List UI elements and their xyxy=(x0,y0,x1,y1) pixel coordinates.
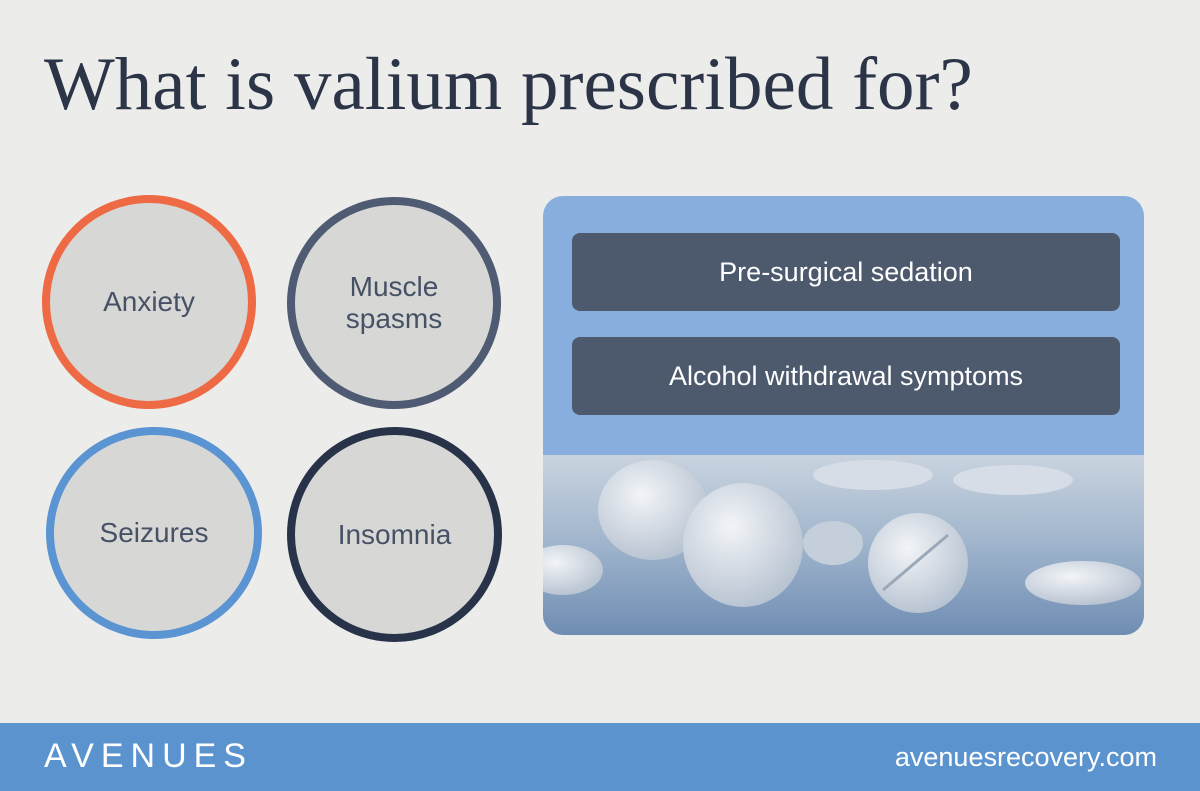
photo: pills xyxy=(543,455,1144,635)
box: alcohol withdrawal xyxy=(572,337,1120,415)
circle: anxiety: Anxiety xyxy=(103,286,195,317)
panel: other uses xyxy=(543,196,1144,635)
circle: insomnia xyxy=(287,427,502,642)
circle: muscle spasms: spasms xyxy=(346,303,442,334)
circle: seizures xyxy=(46,427,262,639)
box: pre-surgical sedation: Pre-surgical sedation xyxy=(719,256,973,286)
circle: anxiety xyxy=(42,195,256,409)
circle: muscle spasms: Muscle xyxy=(350,271,438,302)
box: alcohol withdrawal: Alcohol withdrawal symptoms xyxy=(669,360,1023,390)
logo: AVENUES xyxy=(44,737,253,775)
website: avenuesrecovery.com xyxy=(895,742,1157,772)
box: pre-surgical sedation xyxy=(572,233,1120,311)
circle: insomnia: Insomnia xyxy=(338,518,451,550)
circle: seizures: Seizures xyxy=(100,517,208,548)
circle: muscle spasms xyxy=(287,197,501,409)
footer xyxy=(0,723,1200,791)
title: What is valium prescribed for? xyxy=(44,43,973,126)
